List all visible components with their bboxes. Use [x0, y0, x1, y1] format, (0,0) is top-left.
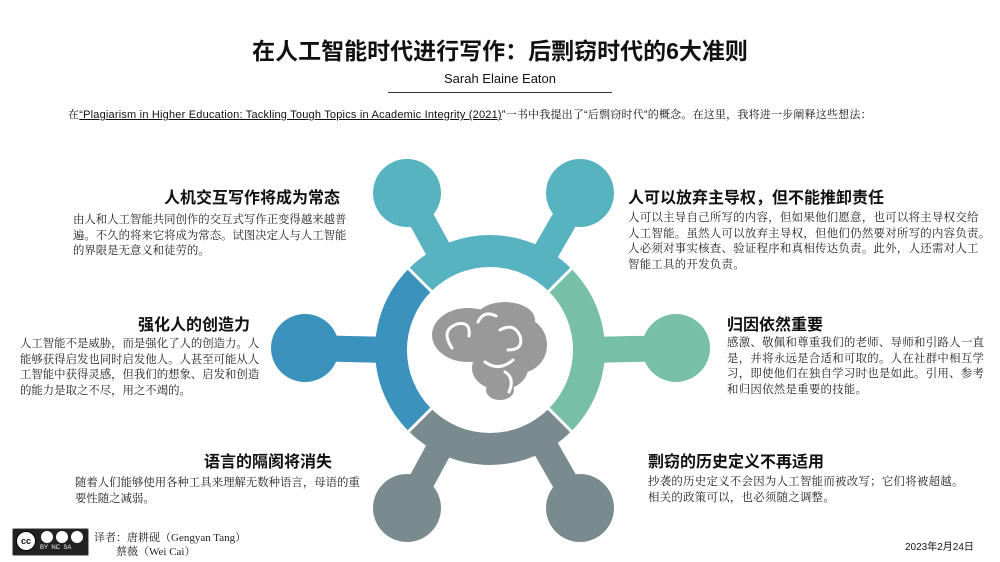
translators [94, 532, 246, 558]
icon: brain [432, 302, 547, 400]
text: bottom-left: 要性随之减弱。 [75, 492, 155, 504]
text: middle-left [20, 337, 259, 397]
left segment [271, 269, 431, 431]
text: bottom-right [648, 475, 964, 504]
heading: bottom-right: 剽窃的历史定义不再适用 [648, 454, 824, 471]
date: 2023年2月24日 [905, 542, 974, 553]
text: middle-right [727, 336, 984, 396]
heading: middle-right: 归因依然重要 [727, 317, 823, 334]
text: bottom-right: 抄袭的历史定义不会因为人工智能而被改写；它们将被超越。 [648, 476, 964, 488]
text: middle-right: 是，并将永远是合适和可取的。人在社群中相互学 [727, 352, 984, 364]
text: top-right: 人必须对事实核查、验证程序和真相传达负责。此外，人还需对人工 [628, 243, 979, 255]
text: bottom-left [75, 476, 360, 504]
text: top-right: 智能工具的开发负责。 [628, 258, 745, 270]
text: top-right: 人可以主导自己所写的内容，但如果他们愿意，也可以将主导权交给 [628, 212, 979, 224]
text: top-left: 的界限是无意义和徒劳的。 [73, 245, 210, 257]
text: top-right: 人工智能。虽然人可以放弃主导权，但他们仍然要对所写的内容负责。 [628, 228, 990, 240]
translators: 译者：唐耕砚（Gengyan Tang） [94, 532, 246, 544]
text: bottom-left: 随着人们能够使用各种工具来理解无数种语言，母语的重 [75, 477, 360, 489]
text: middle-left: 能够获得启发也同时启发他人。人甚至可能从人 [20, 354, 259, 366]
gaps [404, 264, 576, 436]
text: middle-right: 感激、敬佩和尊重我们的老师、导师和引路人一直 [727, 337, 984, 349]
author: Sarah Elaine Eaton [444, 71, 556, 86]
icon: cc license [12, 528, 89, 556]
text: middle-left: 人工智能不是威胁，而是强化了人的创造力。人 [20, 338, 259, 350]
translators: 蔡薇（Wei Cai） [116, 546, 195, 558]
right segment [549, 269, 710, 431]
text: middle-left: 工智能中获得灵感，但我们的想象、启发和创造 [20, 369, 259, 381]
author [388, 71, 612, 93]
text: middle-left: 的能力是取之不尽，用之不竭的。 [20, 384, 191, 396]
intro text: 在“Plagiarism in Higher Education: Tackling Tough Topics in Academic Integrity (2021)”一书中我提出了“后剽窃时代”的概念。在这里，我将进一步阐释这些想法： [68, 109, 872, 121]
text: bottom-right: 相关的政策可以，也必须随之调整。 [648, 492, 835, 504]
heading: top-left: 人机交互写作将成为常态 [164, 190, 340, 207]
icon: cc license: cc [21, 536, 31, 546]
text: top-left: 遍。不久的将来它将成为常态。试图决定人与人工智能 [73, 230, 346, 242]
heading: bottom-left: 语言的隔阂将消失 [204, 454, 332, 471]
heading: top-right: 人可以放弃主导权，但不能推卸责任 [628, 190, 884, 207]
title: 在人工智能时代进行写作：后剽窃时代的6大准则 [252, 38, 748, 64]
top segment with connectors [373, 159, 614, 291]
heading: middle-left: 强化人的创造力 [138, 317, 250, 334]
bottom segment [373, 409, 614, 542]
text: middle-right: 习，即使他们在独自学习时也是如此。引用、参考 [727, 368, 984, 380]
text: top-left: 由人和人工智能共同创作的交互式写作正变得越来越普 [73, 214, 346, 226]
text: top-left [73, 213, 346, 257]
text: middle-right: 和归因依然是重要的技能。 [727, 384, 867, 396]
text: top-right [628, 211, 990, 270]
icon: cc license: BY NC SA [40, 545, 71, 551]
